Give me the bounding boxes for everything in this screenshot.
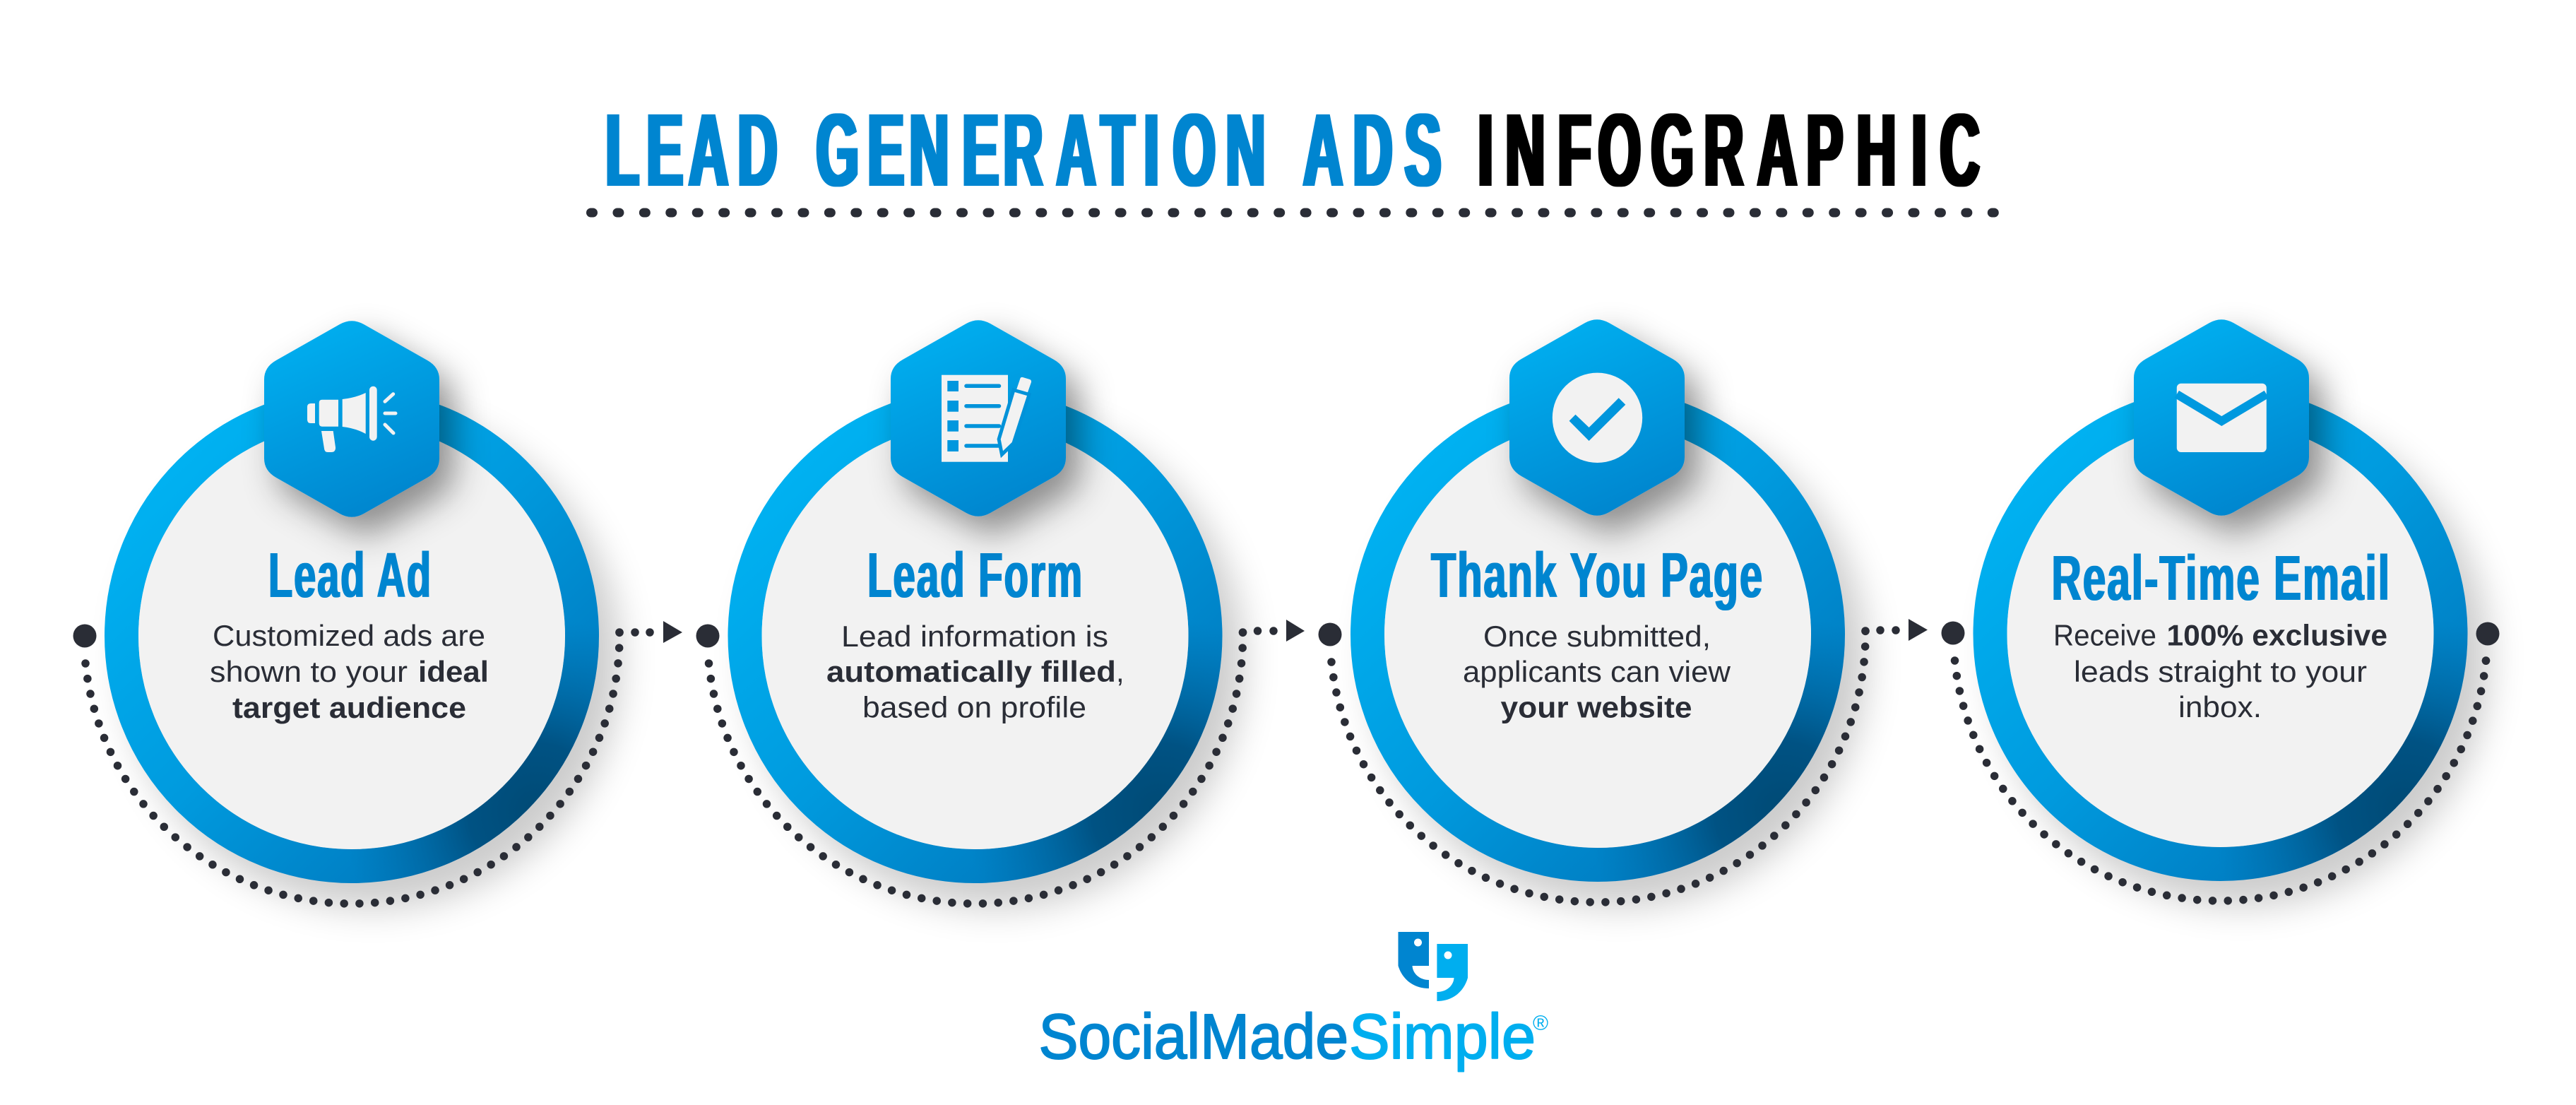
description 4: 100% exclusive	[2167, 619, 2387, 652]
description 1: Customized ads are	[213, 619, 485, 652]
description 2	[826, 620, 1124, 723]
step 1: lead ad	[73, 321, 682, 908]
ring 3	[1367, 404, 1828, 865]
description 2: ,	[1116, 655, 1124, 688]
description 4: Receive	[2053, 619, 2156, 652]
step 2: lead form	[696, 320, 1305, 908]
step 4: real-time email	[1941, 319, 2499, 906]
arrow 1	[663, 621, 682, 643]
heading 4: Real-Time Email	[2051, 543, 2391, 614]
dotted arc 4	[1955, 656, 2490, 901]
start dot 4	[1941, 622, 1965, 644]
dotted arc 2	[709, 627, 1278, 904]
ring 4	[1990, 403, 2451, 864]
logo wordmark: ®	[1533, 1012, 1548, 1035]
hexagon 4	[2134, 319, 2309, 516]
logo wordmark: Simple	[1349, 1002, 1536, 1072]
description 3: applicants can view	[1463, 655, 1731, 688]
icon: envelope	[2177, 384, 2267, 452]
logo icon: left bubble	[1399, 932, 1429, 988]
title: blue part: LEAD GENERATION ADS	[605, 93, 1441, 208]
title	[605, 93, 1980, 208]
end dot	[2476, 622, 2499, 646]
icon: megaphone	[307, 386, 396, 452]
logo wordmark	[1038, 1002, 1548, 1072]
description 1	[210, 619, 489, 724]
description 1: target audience	[232, 691, 466, 724]
ring 2	[744, 406, 1205, 866]
arrow 3	[1909, 619, 1928, 641]
description 4	[2053, 619, 2387, 723]
description 4: inbox.	[2178, 690, 2262, 723]
arrow 2	[1286, 620, 1305, 642]
icon: check mark	[1553, 373, 1642, 463]
ring 1	[121, 406, 582, 866]
hexagon 3	[1509, 319, 1685, 516]
description 2: Lead information is	[841, 620, 1108, 653]
title: black part: INFOGRAPHIC	[1478, 93, 1980, 208]
dotted arc 3	[1331, 626, 1900, 902]
description 2: automatically filled	[826, 655, 1116, 688]
start dot 3	[1318, 623, 1342, 646]
heading 1: Lead Ad	[268, 540, 432, 611]
heading 2: Lead Form	[867, 540, 1084, 611]
logo wordmark: SocialMade	[1038, 1002, 1348, 1072]
description 1: ideal	[418, 655, 489, 688]
hexagon 2	[891, 320, 1066, 516]
logo	[1038, 932, 1548, 1072]
icon: form and pencil	[942, 375, 1031, 462]
description 4: leads straight to your	[2074, 655, 2367, 688]
description 3	[1463, 620, 1731, 723]
logo icon: right bubble	[1437, 944, 1468, 1001]
heading 3: Thank You Page	[1431, 540, 1764, 611]
description 2: based on profile	[862, 691, 1086, 723]
dotted arc 1	[85, 628, 654, 904]
hexagon 1	[264, 321, 439, 517]
start dot 2	[696, 625, 719, 647]
step 3: thank you page	[1318, 319, 1928, 906]
description 1: shown to your	[210, 655, 408, 688]
start dot 1	[73, 625, 96, 647]
description 3: Once submitted,	[1483, 620, 1711, 653]
description 3: your website	[1500, 691, 1692, 723]
